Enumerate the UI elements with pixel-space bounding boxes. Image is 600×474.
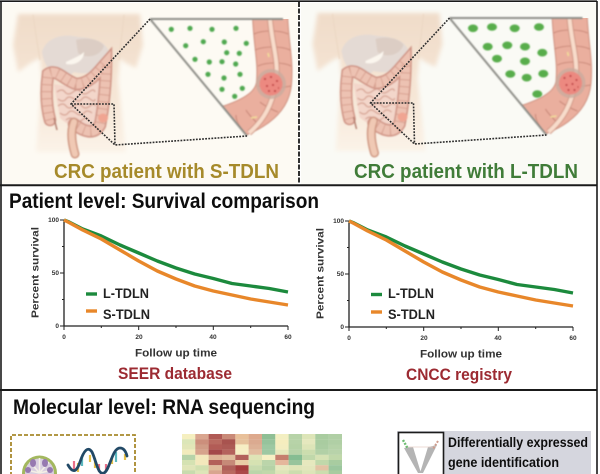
caption: S-TDLN: CRC patient with S-TDLN — [54, 160, 279, 183]
legend: S-TDLN — [103, 307, 150, 322]
legend — [86, 286, 150, 322]
icon: volcano plot — [398, 432, 444, 474]
illustration: abdomen with colon, L-TDLN — [312, 13, 590, 153]
panel: CRC patient with L-TDLN — [301, 3, 597, 184]
chart: CNCC survival curves: 50 — [337, 271, 344, 278]
large lymph node dots — [468, 23, 548, 98]
legend: L-TDLN — [388, 286, 434, 301]
chart: CNCC survival curves: Percent survival — [314, 228, 326, 319]
legend: S-TDLN — [388, 307, 435, 322]
icon: tissue section — [22, 456, 57, 474]
legend: L-TDLN — [103, 286, 149, 301]
chart: SEER survival curves: 20 — [135, 334, 143, 341]
chart: SEER survival curves: 100 — [48, 217, 59, 224]
chart: CNCC survival curves: Follow up time — [420, 348, 502, 360]
chart: SEER survival curves: Follow up time — [135, 348, 217, 360]
chart: SEER survival curves: 0 — [55, 323, 59, 330]
callout: differentially expressed gene identification — [397, 431, 591, 474]
chart: SEER survival curves: Percent survival — [30, 227, 42, 318]
chart: CNCC survival curves — [314, 218, 577, 384]
panel: patient level survival comparison — [2, 187, 597, 389]
heading: patient level: Patient level: Survival comparison — [9, 189, 319, 213]
chart: SEER survival curves — [30, 217, 292, 383]
small lymph node dots — [169, 26, 249, 99]
panel: CRC patient with S-TDLN — [2, 3, 298, 184]
chart: CNCC survival curves: 20 — [420, 335, 428, 342]
illustration: abdomen with colon, S-TDLN — [13, 14, 291, 154]
panel: molecular level RNA sequencing — [2, 392, 597, 474]
sample box: tissue and RNA — [11, 435, 135, 474]
chart: SEER survival curves: 0 — [62, 334, 66, 341]
chart: CNCC survival curves: 100 — [333, 218, 344, 225]
source label: SEER: SEER database — [118, 364, 232, 383]
legend — [371, 286, 435, 322]
chart: SEER survival curves: 50 — [52, 270, 59, 277]
chart: CNCC survival curves: 0 — [340, 324, 344, 331]
caption: L-TDLN: CRC patient with L-TDLN — [354, 160, 578, 183]
chart: SEER survival curves: 60 — [284, 334, 292, 341]
source label: CNCC: CNCC registry — [406, 365, 512, 384]
chart: CNCC survival curves: 0 — [347, 335, 351, 342]
icon: RNA strand — [68, 448, 127, 473]
text: gene identification: gene identification — [448, 454, 559, 470]
heading: molecular level: Molecular level: RNA sequencing — [13, 396, 315, 419]
chart: SEER survival curves: 40 — [209, 334, 217, 341]
chart: CNCC survival curves: 40 — [494, 335, 502, 342]
heatmap — [182, 434, 342, 474]
chart: CNCC survival curves: 60 — [569, 335, 577, 342]
